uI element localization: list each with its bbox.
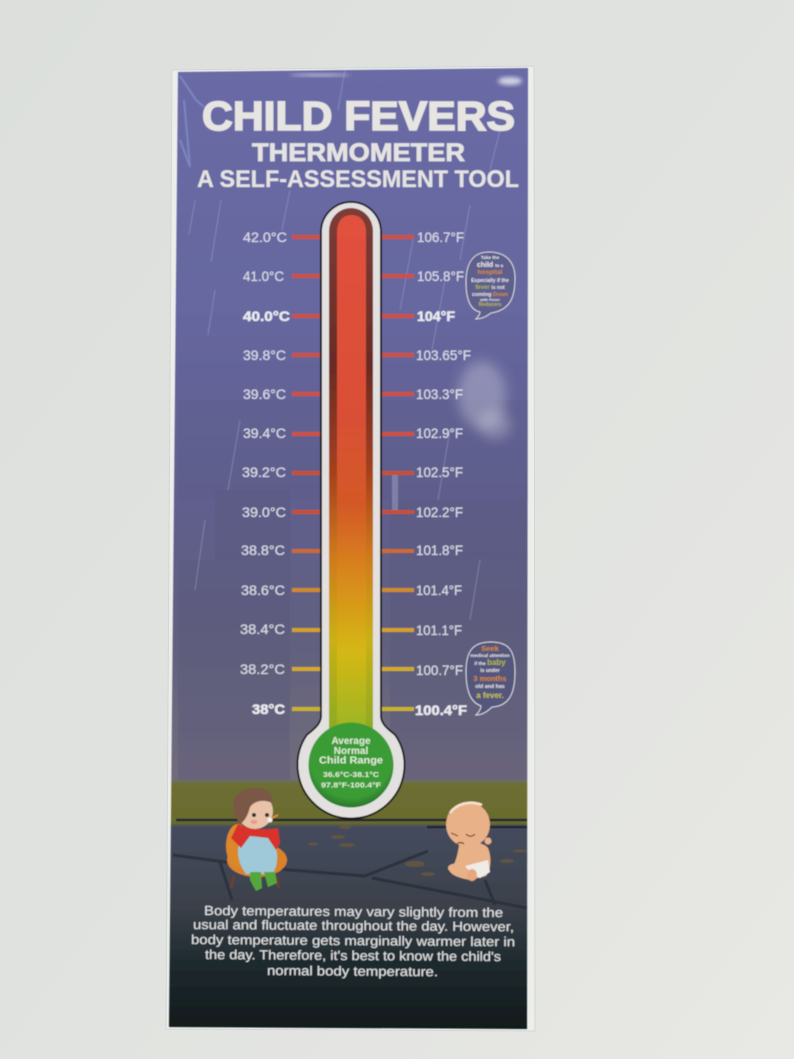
bubble text	[470, 644, 510, 700]
distant antenna	[392, 472, 398, 510]
celsius scale: 40.0°C	[243, 309, 290, 324]
bulb label: Normal	[334, 746, 368, 757]
poster panel	[169, 68, 528, 1029]
bubble text: old and has	[475, 684, 505, 690]
bulb label: Child Range	[319, 756, 383, 766]
fahrenheit scale: 103.65°F	[416, 348, 471, 363]
city buildings silhouette	[178, 400, 528, 780]
celsius scale: 38.8°C	[241, 543, 285, 558]
bubble text: hospital	[478, 269, 503, 276]
subtitle: thermometer: THERMOMETER	[252, 139, 465, 167]
celsius scale	[240, 230, 290, 717]
celsius scale: 39.6°C	[243, 387, 286, 402]
fahrenheit scale: 106.7°F	[417, 230, 464, 245]
boots	[250, 872, 277, 891]
fahrenheit scale: 104°F	[417, 309, 455, 324]
scarf	[231, 824, 280, 850]
bulb label	[319, 736, 383, 790]
tick marks	[292, 237, 414, 709]
head	[237, 793, 273, 829]
ear	[484, 838, 492, 844]
celsius scale: 39.8°C	[243, 348, 286, 363]
bubble outline	[466, 252, 515, 319]
celsius scale: 42.0°C	[243, 230, 287, 245]
rain streaks	[189, 70, 500, 620]
bubble text: medical attention	[470, 653, 510, 659]
celsius scale: 38.4°C	[240, 622, 285, 637]
head	[446, 802, 490, 847]
hair	[233, 788, 272, 824]
bubble text: if the baby	[474, 658, 506, 667]
face	[451, 833, 475, 844]
celsius scale: 38.6°C	[241, 583, 285, 598]
bubble text: Reducers	[479, 302, 502, 308]
bubble text: fever is not	[475, 285, 505, 291]
body text: the day. Therefore, it's best to know the child's	[205, 947, 502, 964]
celsius scale: 41.0°C	[243, 269, 284, 284]
body text: usual and fluctuate throughout the day. However,	[193, 917, 514, 934]
bubble text: 3 months	[473, 674, 507, 683]
subtitle: self-assessment tool: A SELF-ASSESSMENT TOOL	[197, 166, 519, 193]
chair	[227, 843, 287, 877]
bulb label: Average	[331, 736, 371, 747]
title: CHILD FEVERS	[202, 93, 515, 139]
illustration: crying baby	[446, 802, 492, 881]
fahrenheit scale: 100.7°F	[416, 663, 463, 678]
body	[238, 834, 277, 874]
plastic glare	[290, 74, 522, 439]
fahrenheit scale: 101.4°F	[416, 583, 462, 598]
thermometer	[297, 202, 404, 818]
fahrenheit scale: 103.3°F	[416, 387, 463, 402]
bubble text: with Fever	[479, 297, 500, 302]
bulb label: 36.6°C-38.1°C	[323, 770, 380, 779]
fahrenheit scale: 102.9°F	[416, 426, 463, 441]
bubble text: Seek	[481, 644, 500, 653]
ground cracks and leaves	[173, 820, 527, 908]
fahrenheit scale: 105.8°F	[417, 269, 464, 284]
green bulb	[308, 722, 394, 808]
fahrenheit scale: 102.5°F	[416, 465, 463, 480]
bubble text	[471, 255, 509, 308]
celsius scale: 39.4°C	[243, 426, 286, 441]
illustration: sick child on chair	[226, 788, 287, 891]
bubble text: child to a	[477, 262, 504, 269]
lightning bolt	[180, 76, 204, 167]
plastic sleeve	[166, 66, 535, 1031]
mercury channel	[329, 208, 373, 735]
celsius scale: 39.2°C	[242, 465, 286, 480]
body text: normal body temperature.	[267, 963, 438, 979]
mercury column	[337, 215, 366, 735]
body text: body temperature gets marginally warmer later in	[191, 932, 515, 949]
bulb label: 97.8°F-100.4°F	[321, 780, 381, 790]
poster background	[169, 68, 528, 1029]
body	[449, 840, 490, 880]
speech bubble: hospital advice	[466, 252, 515, 319]
speech bubble: baby under 3 months	[466, 642, 515, 715]
diaper	[465, 860, 490, 878]
celsius scale: 38.2°C	[240, 662, 285, 677]
feet	[448, 864, 462, 872]
fahrenheit scale: 100.4°F	[415, 703, 467, 718]
body text: Body temperatures may vary slightly from the	[204, 903, 503, 920]
face details	[252, 813, 256, 817]
bubble outline	[466, 642, 515, 715]
celsius scale: 38°C	[252, 702, 285, 717]
bubble text: Especially if the	[471, 278, 509, 284]
bubble text: a fever.	[476, 691, 504, 700]
fahrenheit scale	[415, 230, 471, 718]
thermometer casing	[297, 202, 404, 818]
bubble text: is under	[480, 668, 500, 674]
bubble text: Take the	[481, 255, 500, 260]
fahrenheit scale: 101.1°F	[416, 623, 462, 638]
fahrenheit scale: 101.8°F	[416, 543, 463, 558]
celsius scale: 39.0°C	[242, 505, 286, 520]
fahrenheit scale: 102.2°F	[416, 505, 463, 520]
bubble text: coming Down	[472, 292, 509, 298]
body text	[191, 903, 515, 979]
